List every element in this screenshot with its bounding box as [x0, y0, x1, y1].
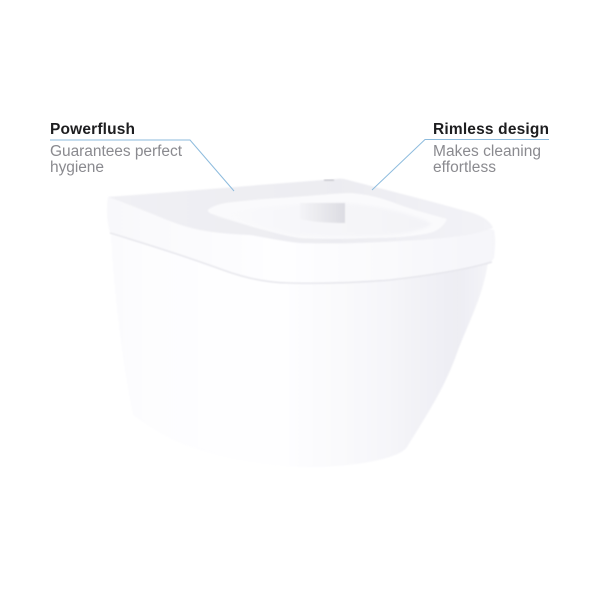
toilet illustration — [107, 179, 495, 467]
heading: Powerflush: Powerflush — [50, 121, 135, 138]
rim lower shadow line — [110, 233, 492, 283]
logo mark — [324, 180, 334, 181]
description: Powerflush: Guarantees perfect — [50, 143, 183, 160]
callout: Powerflush — [50, 121, 234, 191]
leader line: Rimless design — [372, 140, 549, 190]
toilet top surface — [108, 179, 493, 243]
description: Powerflush: hygiene — [50, 159, 104, 176]
leader line: Powerflush — [50, 140, 234, 191]
callout: Rimless design — [372, 121, 549, 190]
description: Rimless design: effortless — [433, 159, 496, 176]
bowl inner surface — [215, 203, 432, 236]
heading: Rimless design: Rimless design — [433, 121, 549, 138]
bowl rear shadow — [300, 203, 345, 223]
toilet body — [111, 235, 488, 467]
description: Powerflush — [50, 143, 183, 176]
toilet rim band — [107, 197, 495, 283]
toilet bowl opening — [208, 193, 447, 239]
description: Rimless design — [433, 143, 541, 176]
description: Rimless design: Makes cleaning — [433, 143, 541, 160]
